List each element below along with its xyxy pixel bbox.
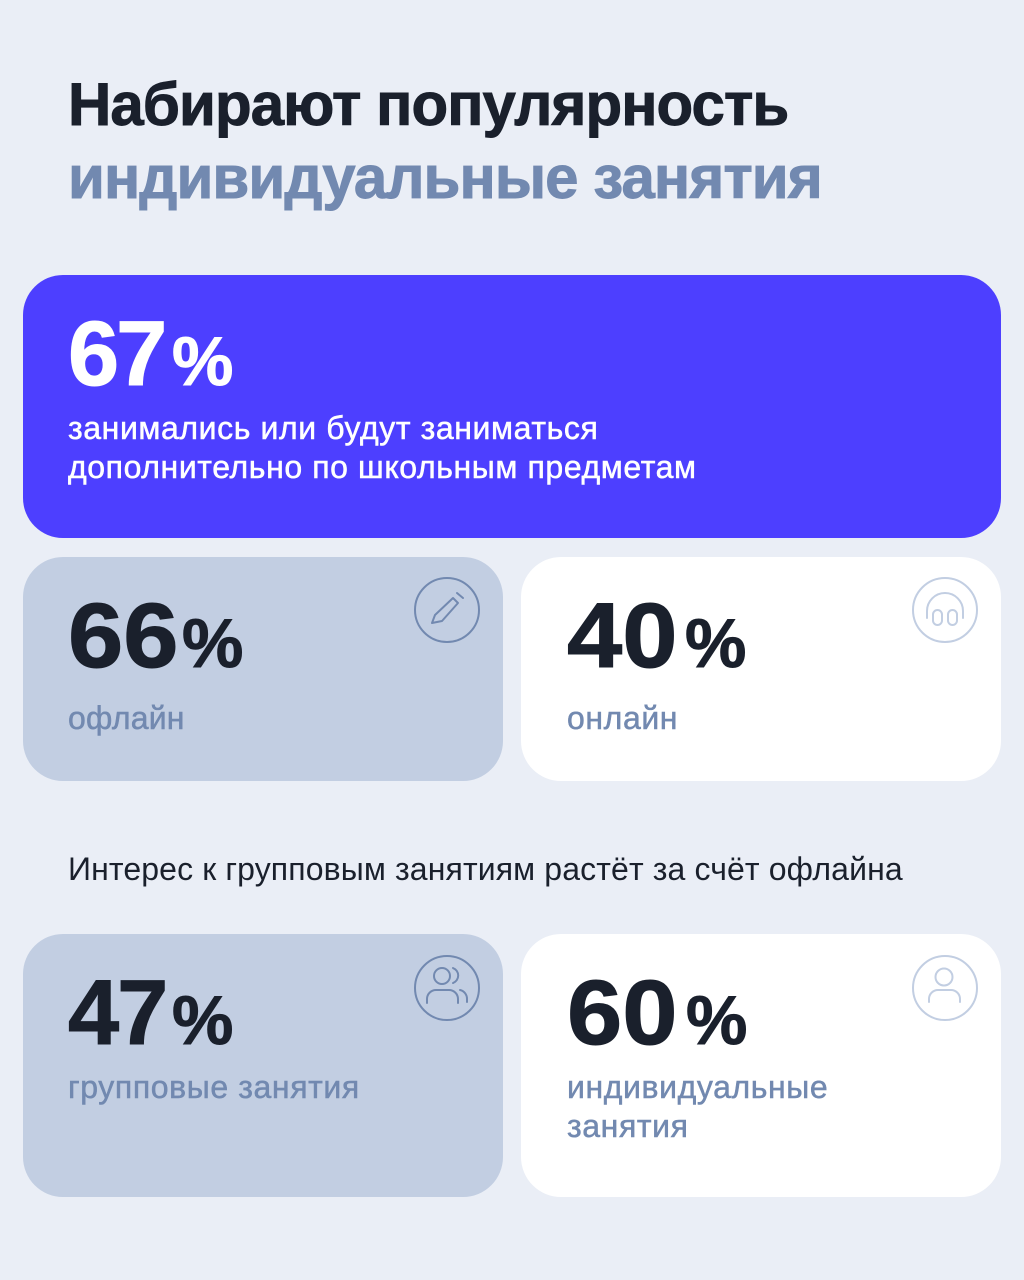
- stat: 47%: 47: [68, 962, 166, 1064]
- label: individual: индивидуальные: [567, 1069, 828, 1105]
- description: занимались или будут заниматься: [68, 410, 598, 446]
- stat: 60%: 60: [567, 962, 678, 1064]
- label: offline: офлайн: [68, 700, 185, 736]
- label: individual: [567, 1069, 828, 1144]
- stat: 40%: %: [685, 605, 746, 682]
- stat: 47%: %: [172, 982, 233, 1059]
- stat: 67%: 67: [68, 303, 164, 405]
- stat: 67%: %: [172, 323, 233, 400]
- title: индивидуальные занятия: [68, 144, 822, 211]
- stat: 60%: %: [686, 982, 747, 1059]
- icon: people: [414, 955, 480, 1021]
- label: group: групповые занятия: [68, 1069, 360, 1105]
- stat: 40%: [567, 585, 746, 687]
- title: Набирают популярность: [68, 71, 788, 138]
- label: online: онлайн: [567, 700, 678, 736]
- title: [68, 71, 822, 211]
- description: [68, 410, 697, 485]
- panel: individual: [521, 934, 1001, 1197]
- stat: 67%: [68, 303, 233, 405]
- panel: group: [23, 934, 503, 1197]
- subheading: Интерес к групповым занятиям растёт за счёт офлайна: [68, 851, 903, 887]
- icon: pencil: [414, 577, 480, 643]
- stat: 66%: [68, 585, 243, 687]
- stat: 47%: [68, 962, 233, 1064]
- label: individual: занятия: [567, 1108, 689, 1144]
- stat: 66%: %: [182, 605, 243, 682]
- panel: offline: [23, 557, 503, 781]
- panel: online: [521, 557, 1001, 781]
- icon: headphones: [912, 577, 978, 643]
- stat: 60%: [567, 962, 747, 1064]
- panel: 67%: [23, 275, 1001, 538]
- stat: 40%: 40: [567, 585, 678, 687]
- stat: 66%: 66: [68, 585, 179, 687]
- icon: person: [912, 955, 978, 1021]
- description: дополнительно по школьным предметам: [68, 449, 697, 485]
